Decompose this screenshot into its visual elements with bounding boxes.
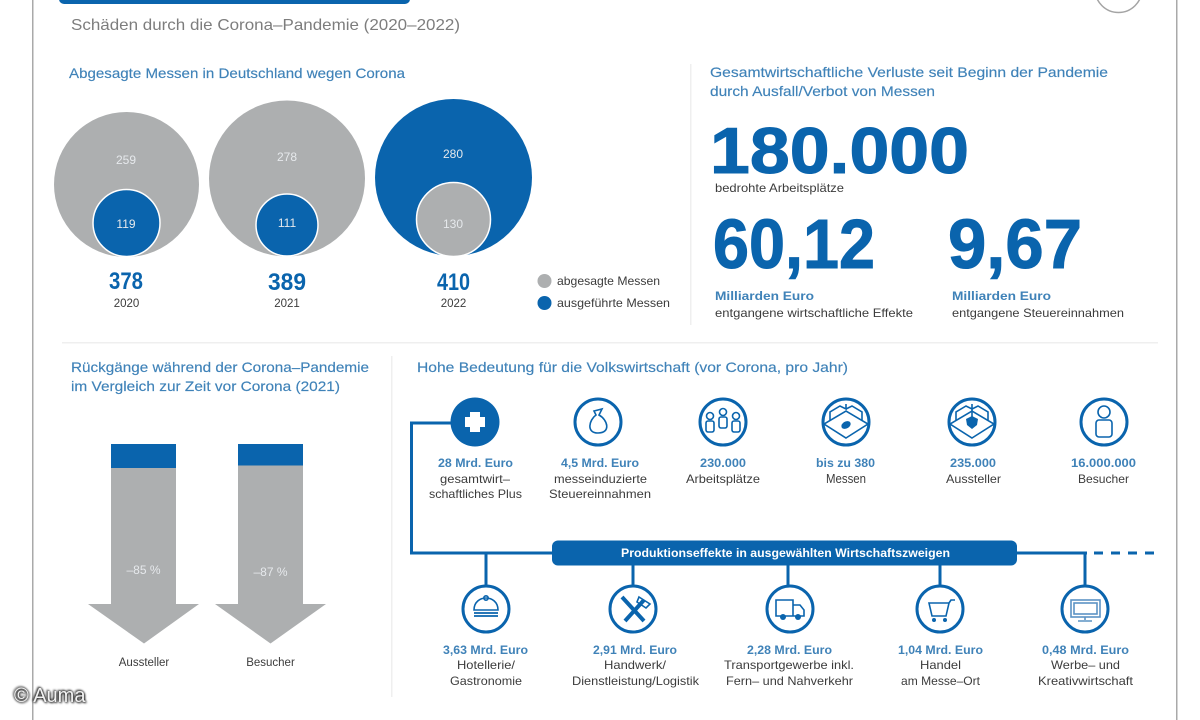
- stat: tax revenue: [948, 205, 1124, 320]
- arrow: exhibitors: [88, 444, 199, 669]
- item: tax revenue: [549, 399, 651, 501]
- heading: declines: [71, 359, 369, 394]
- item: transport: Fern– und Nahverkehr: [726, 674, 853, 688]
- item: tax revenue: 4,5 Mrd. Euro: [561, 456, 639, 470]
- item: exhibitors: [946, 399, 1001, 486]
- bubble 2021: 2021: [274, 298, 300, 310]
- bubble 2022: 410: [437, 269, 470, 296]
- bubble 2021: 278: [277, 150, 297, 164]
- stat: jobs: 180.000: [710, 114, 969, 187]
- bubble 2020: 2020: [114, 298, 139, 310]
- bubble 2020: 378: [109, 268, 143, 295]
- production effects banner: [552, 540, 1017, 566]
- item: jobs: [686, 399, 760, 486]
- arrow: visitors: Besucher: [246, 657, 295, 669]
- heading: declines: im Vergleich zur Zeit vor Corona (2021): [71, 378, 340, 394]
- bubble 2022: [375, 99, 532, 310]
- item: retail: [898, 586, 983, 688]
- panel: economic importance: [412, 359, 1156, 688]
- stat: tax revenue: 9,67: [948, 205, 1082, 283]
- heading: declines: Rückgänge während der Corona–Pandemie: [71, 359, 369, 375]
- item: exhibitors: 235.000: [950, 456, 996, 470]
- item: retail: Handel: [920, 658, 961, 672]
- stat: tax revenue: Milliarden Euro: [952, 289, 1051, 303]
- stat: jobs: bedrohte Arbeitsplätze: [715, 181, 844, 195]
- item: transport: Transportgewerbe inkl.: [724, 658, 854, 672]
- bubble 2021: [209, 100, 365, 310]
- subtitle: Schäden durch die Corona–Pandemie (2020–2022): [71, 17, 460, 34]
- item: advertising: 0,48 Mrd. Euro: [1042, 643, 1129, 657]
- stat: economic effects: Milliarden Euro: [715, 289, 814, 303]
- production effects banner: Produktionseffekte in ausgewählten Wirtschaftszweigen: [621, 546, 950, 560]
- heading: cancelled trade fairs: Abgesagte Messen in Deutschland wegen Corona: [69, 65, 405, 81]
- heading: economic losses: [710, 64, 1108, 99]
- heading: economic losses: durch Ausfall/Verbot von Messen: [710, 83, 935, 99]
- connector lines: [412, 423, 1156, 586]
- item: retail: 1,04 Mrd. Euro: [898, 643, 983, 657]
- item: economic plus: schaftliches Plus: [429, 487, 522, 501]
- copyright watermark: © Auma: [14, 685, 85, 707]
- arrow: exhibitors: Aussteller: [119, 657, 169, 669]
- heading: economic importance: Hohe Bedeutung für die Volkswirtschaft (vor Corona, pro Jahr): [417, 359, 848, 375]
- item: crafts: [572, 586, 700, 688]
- bubble 2020: 259: [116, 153, 136, 167]
- logo circle: [1095, 0, 1142, 12]
- item: crafts: Dienstleistung/Logistik: [572, 674, 700, 688]
- item: economic plus: [429, 398, 522, 501]
- item: hospitality: Hotellerie/: [457, 658, 516, 672]
- item: trade fairs: [816, 399, 875, 486]
- panel: declines: [71, 359, 369, 669]
- stat: economic effects: [713, 205, 913, 320]
- arrow: exhibitors: –85 %: [126, 563, 161, 577]
- stat: tax revenue: entgangene Steuereinnahmen: [952, 306, 1124, 320]
- arrow: visitors: –87 %: [253, 565, 288, 579]
- item: tax revenue: Steuereinnahmen: [549, 487, 651, 501]
- bubble 2020: 119: [116, 217, 136, 231]
- item: exhibitors: Aussteller: [946, 472, 1001, 486]
- legend: abgesagte Messen: [557, 274, 660, 288]
- bubble 2021: 111: [278, 216, 296, 230]
- item: hospitality: 3,63 Mrd. Euro: [443, 643, 528, 657]
- item: retail: am Messe–Ort: [901, 674, 981, 688]
- title bar: [59, 0, 410, 4]
- item: hospitality: Gastronomie: [450, 674, 522, 688]
- item: trade fairs: Messen: [826, 472, 866, 486]
- item: visitors: 16.000.000: [1071, 456, 1136, 470]
- item: visitors: Besucher: [1078, 472, 1129, 486]
- bubble 2022: 280: [443, 147, 463, 161]
- item: tax revenue: messeinduzierte: [554, 472, 647, 486]
- panel: economic losses: [710, 64, 1124, 320]
- item: advertising: Kreativwirtschaft: [1038, 674, 1134, 688]
- stat: economic effects: 60,12: [713, 205, 875, 283]
- item: jobs: 230.000: [700, 456, 746, 470]
- item: advertising: Werbe– und: [1051, 658, 1120, 672]
- item: jobs: Arbeitsplätze: [686, 472, 760, 486]
- item: hospitality: [443, 586, 528, 688]
- item: crafts: Handwerk/: [604, 658, 667, 672]
- heading: economic losses: Gesamtwirtschaftliche Verluste seit Beginn der Pandemie: [710, 64, 1108, 80]
- item: economic plus: 28 Mrd. Euro: [438, 456, 513, 470]
- stat: economic effects: entgangene wirtschaftliche Effekte: [715, 306, 913, 320]
- item: transport: [724, 586, 854, 688]
- arrow: visitors: [215, 444, 326, 669]
- bubble 2021: 389: [268, 269, 306, 296]
- bubble 2020: [54, 112, 199, 310]
- item: transport: 2,28 Mrd. Euro: [747, 643, 832, 657]
- bubble 2022: 130: [443, 217, 463, 231]
- panel: cancelled trade fairs: [54, 65, 670, 310]
- item: economic plus: gesamtwirt–: [440, 472, 510, 486]
- legend: ausgeführte Messen: [557, 296, 670, 310]
- item: visitors: [1071, 399, 1136, 486]
- bubble 2022: 2022: [441, 298, 466, 310]
- legend: [538, 274, 670, 310]
- item: trade fairs: bis zu 380: [816, 456, 875, 470]
- item: crafts: 2,91 Mrd. Euro: [593, 643, 677, 657]
- item: advertising: [1038, 586, 1134, 688]
